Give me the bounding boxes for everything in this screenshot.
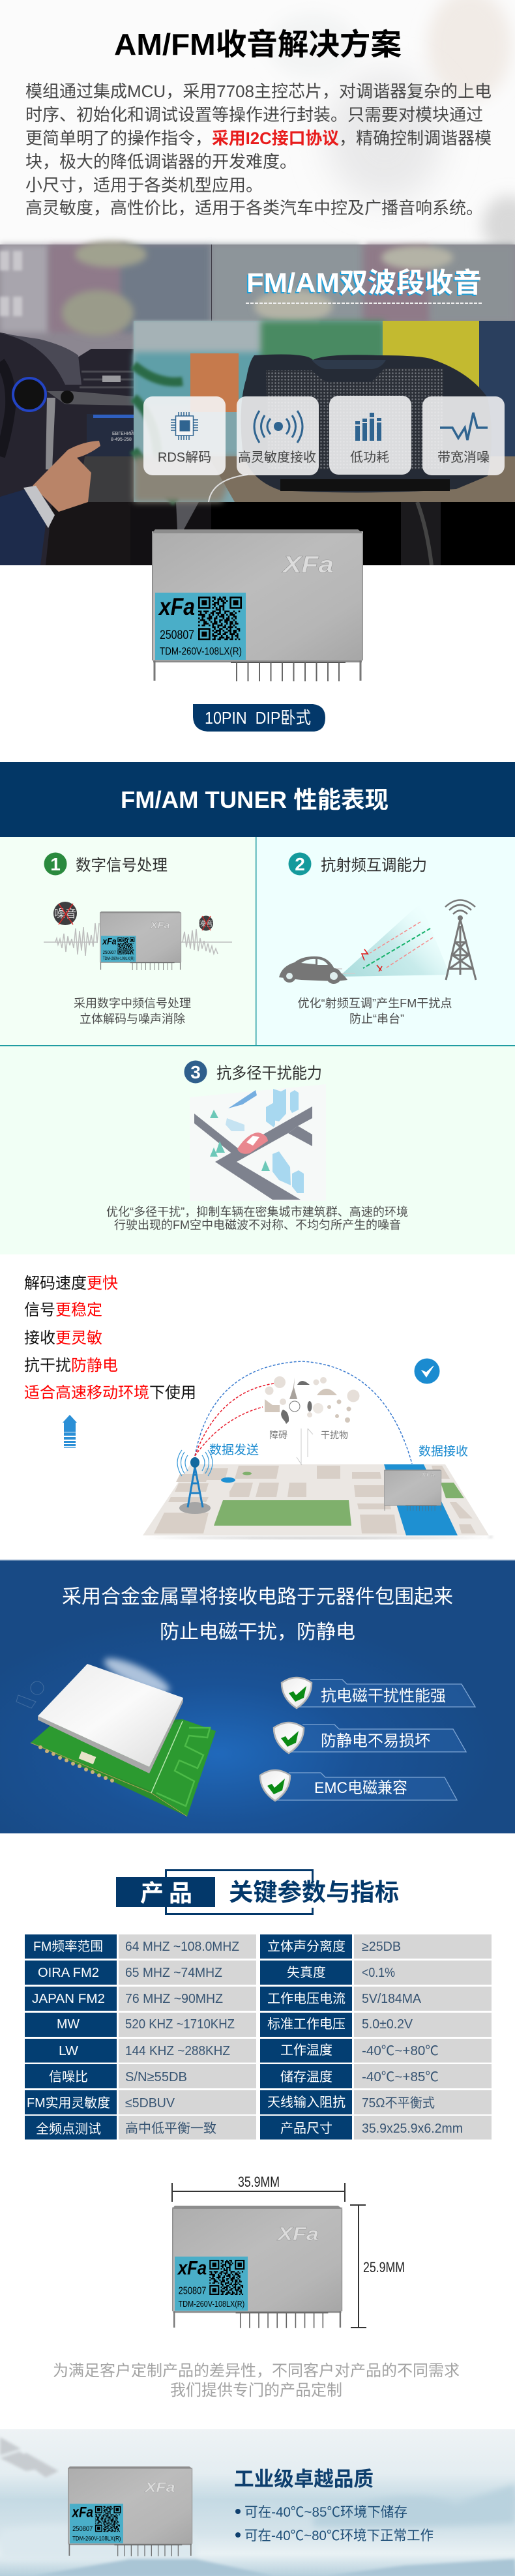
intro text block: 高灵敏度，高性价比，适用于各类汽车中控及广播音响系统。 xyxy=(25,198,483,218)
parameter table xyxy=(25,1934,492,2140)
right labels: 储存温度 xyxy=(280,2069,332,2084)
left values: 76 MHZ ~90MHZ xyxy=(125,1992,223,2006)
intro text block: 模组通过集成MCU，采用7708主控芯片，对调谐器复杂的上电 xyxy=(25,81,492,101)
map labels: 数据发送 xyxy=(209,1443,259,1457)
width dimension xyxy=(172,2174,345,2202)
feature card: high sensitivity xyxy=(237,396,319,475)
section heading: 采用合金金属罩将接收电路于元器件包围起来 xyxy=(62,1586,453,1608)
left values: 64 MHZ ~108.0MHZ xyxy=(125,1940,239,1954)
river xyxy=(384,1464,458,1535)
right labels: 失真度 xyxy=(287,1965,326,1980)
right values: 35.9x25.9x6.2mm xyxy=(362,2122,463,2136)
right labels: 工作电压电流 xyxy=(267,1991,346,2006)
module on map xyxy=(384,1470,441,1511)
3D shielded module xyxy=(31,1652,216,1816)
black lower right band xyxy=(211,502,515,565)
benefit list: 接收更灵敏 xyxy=(24,1329,102,1347)
heading: 工业级卓越品质 xyxy=(234,2468,374,2491)
right labels: 标准工作电压 xyxy=(267,2017,346,2032)
panel heading: 数字信号处理 xyxy=(76,857,168,874)
module on ice background: xFa xyxy=(72,2504,93,2520)
caption: 采用数字中频信号处理 xyxy=(74,997,191,1010)
section heading: key parameters: 关键参数与指标 xyxy=(229,1879,399,1906)
section heading band: tuner performance: FM/AM TUNER 性能表现 xyxy=(121,786,389,813)
feature: EMC: EMC电磁兼容 xyxy=(314,1779,407,1797)
waveform left xyxy=(44,923,99,956)
benefit list: 抗干扰防静电 xyxy=(24,1357,118,1374)
right values: -40℃~+85℃ xyxy=(362,2070,439,2084)
right labels: 工作温度 xyxy=(280,2043,332,2058)
left values: S/N≥55DB xyxy=(125,2070,187,2084)
feature: anti-static: 防静电不易损坏 xyxy=(321,1732,430,1750)
dashboard and driver: 8-495-258 xyxy=(111,437,132,442)
car xyxy=(279,956,355,984)
product module photo: xFa xyxy=(158,593,195,620)
waveform right xyxy=(181,929,232,954)
product module photo: XFa xyxy=(282,551,334,578)
module thumbnail: TDM-260V-108LX(R) xyxy=(103,956,134,961)
dashed signal arrows xyxy=(362,922,433,971)
caption: 防止“串台” xyxy=(349,1013,404,1026)
caption xyxy=(106,1206,408,1232)
right values: ≥25DB xyxy=(362,1940,401,1954)
left labels: OIRA FM2 xyxy=(38,1966,99,1980)
panel: multipath interference xyxy=(0,1046,515,1254)
left values xyxy=(125,1940,239,2136)
module front view xyxy=(172,2206,342,2328)
product module photo: 250807 xyxy=(160,629,194,642)
title: AM/FM收音解决方案 xyxy=(114,27,402,61)
section heading: 防止电磁干扰，防静电 xyxy=(160,1621,355,1643)
park xyxy=(214,1500,351,1526)
left labels: MW xyxy=(57,2017,80,2032)
module thumbnail xyxy=(100,911,181,970)
map illustration xyxy=(143,1450,492,1539)
caption xyxy=(297,997,452,1026)
right values: 5.0±0.2V xyxy=(362,2017,413,2032)
panel heading: 抗射频互调能力 xyxy=(321,857,427,874)
height dimension xyxy=(350,2205,405,2328)
module front view: 250807 xyxy=(179,2285,206,2296)
left labels: FM实用灵敏度 xyxy=(27,2095,110,2110)
map labels: 数据接收 xyxy=(419,1444,468,1458)
icon: pulse xyxy=(440,413,488,440)
module on ice background: 250807 xyxy=(72,2525,93,2533)
row values background xyxy=(119,1934,492,2140)
number badge 1: 1 xyxy=(50,854,61,874)
intro text block: 采用I2C接口协议 xyxy=(212,128,339,148)
dimension drawing xyxy=(172,2174,405,2328)
feature: anti-static xyxy=(274,1723,466,1753)
pill label: 10PIN DIP: 10PIN DIP卧式 xyxy=(205,708,311,728)
height dimension: 25.9MM xyxy=(363,2259,405,2275)
isometric city illustration xyxy=(190,1084,326,1201)
section heading: FM/AM dual band: FM/AM双波段收音 xyxy=(245,269,480,299)
noise badge small: 噪音 xyxy=(199,919,213,928)
map labels: 障碍 xyxy=(269,1430,287,1440)
feature: anti-EMI: 抗电磁干扰性能强 xyxy=(321,1687,446,1705)
product module photo: TDM-260V-108LX(R) xyxy=(160,646,242,657)
intro text block: 小尺寸，适用于各类机型应用。 xyxy=(25,175,263,195)
panel heading: 抗多径干扰能力 xyxy=(216,1065,322,1082)
left values: 520 KHZ ~1710KHZ xyxy=(125,2017,235,2032)
intro text block: 块，极大的降低调谐器的开发难度。 xyxy=(25,152,297,171)
panel: RF intermodulation xyxy=(256,837,515,1045)
noise badge small xyxy=(199,915,213,931)
module thumbnail: 250807 xyxy=(103,949,116,955)
right values xyxy=(362,1940,463,2136)
white section background xyxy=(0,1833,515,2429)
customization note xyxy=(53,2362,460,2399)
module on ice background: TDM-260V-108LX(R) xyxy=(72,2535,121,2542)
icon: chip xyxy=(171,412,198,440)
speaker body xyxy=(209,355,492,502)
icon: bars xyxy=(355,413,381,441)
intro text block: 更简单明了的操作指令， xyxy=(25,128,212,148)
right labels xyxy=(267,1939,346,2136)
right labels: 立体声分离度 xyxy=(267,1939,346,1954)
left values: 65 MHZ ~74MHZ xyxy=(125,1966,222,1980)
check badge xyxy=(415,1359,439,1384)
noise badge large: 噪音 xyxy=(54,908,76,920)
section background: blurred top photo xyxy=(0,0,515,254)
caption xyxy=(74,997,191,1026)
benefit list: 适合高速移动环境下使用 xyxy=(24,1384,196,1402)
module on ice background: XFa xyxy=(144,2480,175,2495)
module thumbnail: XFa xyxy=(149,919,170,930)
intro text block: ，精确控制调谐器模 xyxy=(339,128,492,148)
city blocks xyxy=(154,1466,476,1533)
section background: white xyxy=(0,1254,515,1560)
signal arcs xyxy=(195,1361,412,1464)
customization note: 我们提供专门的产品定制 xyxy=(170,2382,342,2399)
right values: -40℃~+80℃ xyxy=(362,2044,439,2058)
panel: dual band photo background xyxy=(0,241,515,565)
white band under photo xyxy=(0,565,515,762)
product module photo xyxy=(152,529,363,681)
benefit list: 解码速度更快 xyxy=(24,1275,118,1292)
feature card: RDS decoding: RDS解码 xyxy=(158,450,211,465)
map labels xyxy=(209,1429,468,1465)
feature: EMC xyxy=(260,1770,457,1801)
feature card: low power: 低功耗 xyxy=(350,450,389,465)
module thumbnail: xFa xyxy=(102,937,117,947)
number badge 1 xyxy=(44,853,66,875)
section heading xyxy=(62,1586,453,1643)
left values: 高中低平衡一致 xyxy=(125,2121,216,2136)
right labels: 产品尺寸 xyxy=(280,2121,332,2136)
module on ice background xyxy=(68,2466,192,2556)
noise badge large xyxy=(53,902,77,925)
icon: upward arrow xyxy=(63,1415,77,1447)
number badge 3 xyxy=(184,1060,207,1084)
feature card: noise reduction xyxy=(422,396,505,475)
intro text block: 时序、初始化和调试设置等操作进行封装。只需要对模块通过 xyxy=(25,105,483,125)
module front view: xFa xyxy=(177,2258,207,2279)
left labels: 信噪比 xyxy=(49,2069,88,2084)
right values: 5V/184MA xyxy=(362,1992,422,2006)
inset photo: outdoor speaker xyxy=(134,321,515,502)
section heading: FM/AM dual band: FM/AM双波段收音 xyxy=(246,267,482,298)
caption: 立体解码与噪声消除 xyxy=(80,1013,185,1026)
benefit list xyxy=(24,1275,196,1402)
left labels: JAPAN FM2 xyxy=(32,1992,105,2006)
number badge 3: 3 xyxy=(190,1062,201,1082)
module front view: TDM-260V-108LX(R) xyxy=(179,2299,244,2309)
signal beam xyxy=(339,903,450,977)
row labels background xyxy=(25,1934,352,2140)
left labels: LW xyxy=(59,2044,78,2058)
caption: 行驶出现的FM空中电磁波不对称、不均匀所产生的噪音 xyxy=(114,1219,401,1232)
map labels: 干扰物 xyxy=(321,1430,348,1440)
left labels: FM频率范围 xyxy=(33,1939,103,1954)
section heading: key parameters: 产 品 xyxy=(140,1880,192,1906)
panel: shielding blue section xyxy=(0,1560,515,1833)
bullet: storage temperature: 可在-40℃~85℃环境下储存 xyxy=(244,2505,407,2520)
radio tower xyxy=(445,900,476,980)
feature card: noise reduction: 带宽消噪 xyxy=(437,450,490,465)
number badge 2: 2 xyxy=(295,854,305,874)
module on map: XFa xyxy=(420,1472,435,1478)
panel: industrial quality xyxy=(0,2429,515,2576)
dashboard and driver xyxy=(0,333,211,565)
customization note: 为满足客户定制产品的差异性，不同客户对产品的不同需求 xyxy=(53,2362,460,2380)
bullet: working temperature: 可在-40℃~80℃环境下正常工作 xyxy=(244,2528,434,2543)
left labels xyxy=(27,1939,110,2137)
intro text block xyxy=(25,81,492,218)
left labels: 全频点测试 xyxy=(36,2122,101,2137)
benefit list: 信号更稳定 xyxy=(24,1301,102,1319)
faint decor xyxy=(16,1681,44,1708)
interference cluster xyxy=(265,1376,360,1424)
left values: 144 KHZ ~288KHZ xyxy=(125,2044,230,2058)
feature card: high sensitivity: 高灵敏度接收 xyxy=(238,450,316,465)
radio tower with signal xyxy=(177,1450,252,1514)
right values: <0.1% xyxy=(362,1966,395,1980)
dashboard and driver: ЕВГЕНИЙ xyxy=(112,430,134,436)
feature card: RDS decoding xyxy=(143,396,226,475)
caption: 优化“多径干扰”，抑制车辆在密集城市建筑群、高速的环境 xyxy=(106,1206,408,1219)
icon: signal xyxy=(254,411,302,443)
module front view: XFa xyxy=(276,2224,319,2245)
section heading band: tuner performance xyxy=(0,762,515,837)
pill label: 10PIN DIP xyxy=(193,704,325,732)
feature card: low power xyxy=(329,396,411,475)
caption: 优化“射频互调”产生FM干扰点 xyxy=(297,997,452,1010)
right values: 75Ω不平衡式 xyxy=(362,2095,435,2110)
panel: digital signal processing xyxy=(0,837,256,1045)
width dimension: 35.9MM xyxy=(238,2174,280,2190)
right labels: 天线输入阻抗 xyxy=(267,2095,346,2110)
feature: anti-EMI xyxy=(282,1678,475,1708)
left values: ≤5DBUV xyxy=(125,2096,175,2110)
section heading: key parameters xyxy=(116,1870,399,1914)
number badge 2 xyxy=(288,853,312,875)
